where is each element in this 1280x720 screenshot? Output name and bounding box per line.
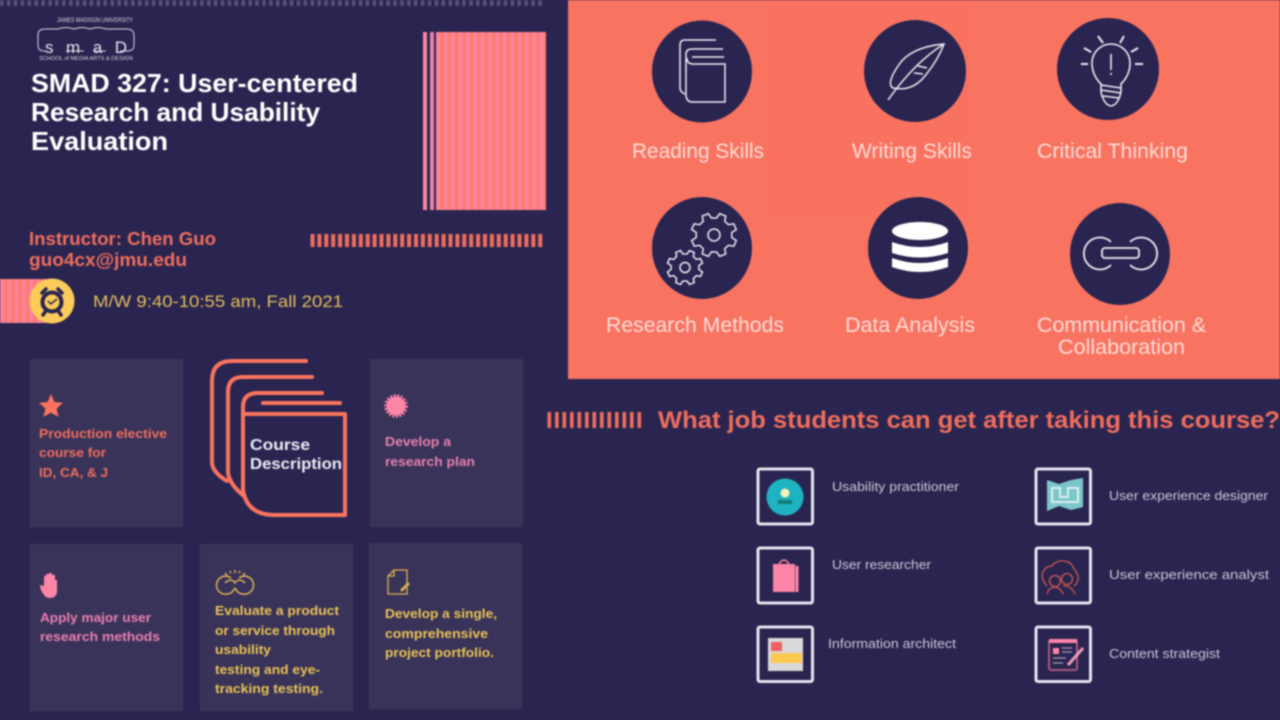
icon: map [1047, 478, 1083, 511]
job: user researcher [758, 548, 932, 603]
panel: skills [568, 0, 1280, 379]
icon: teal badge [766, 478, 804, 516]
card text: comprehensive [385, 626, 488, 641]
job: usability practitioner [758, 469, 960, 524]
card: research methods [30, 544, 183, 711]
icon: layout [768, 638, 803, 671]
label: User experience analyst [1109, 567, 1269, 582]
card: evaluate [200, 544, 353, 711]
heading stripes [546, 412, 643, 428]
title [31, 68, 358, 156]
icon: cloud people [1042, 561, 1078, 594]
left stripe accent [0, 279, 46, 323]
label: Reading Skills [632, 140, 764, 163]
skill: data analysis [868, 197, 968, 299]
card text: Evaluate a product [215, 603, 340, 618]
top stripe band [0, 0, 545, 6]
skill: communication [1070, 203, 1170, 305]
icon: hand [40, 573, 57, 598]
job: user experience analyst [1036, 548, 1269, 603]
instructor details [29, 229, 216, 270]
logo: SMAD: JAMES MADISON UNIVERSITY [57, 18, 133, 24]
card text: research plan [385, 454, 475, 469]
title: SMAD 327: User-centered [31, 68, 358, 98]
label: Communication & [1037, 314, 1206, 337]
course description book [212, 361, 345, 515]
job: information architect [758, 627, 956, 682]
icon: broken link [217, 570, 253, 594]
card text: or service through [215, 623, 335, 638]
logo: SMAD [38, 18, 134, 62]
card: production elective [30, 359, 183, 527]
skill: research methods [652, 197, 752, 299]
book label: Course [250, 437, 310, 454]
card text: project portfolio. [385, 645, 494, 660]
card text: tracking testing. [215, 681, 323, 696]
icon: shopping bag [773, 560, 798, 592]
card text [385, 434, 475, 469]
title: Evaluation [31, 126, 168, 156]
label: Content strategist [1109, 646, 1220, 661]
book label [250, 437, 342, 473]
skill: writing [864, 20, 966, 122]
book label: Description [250, 456, 342, 473]
icon: alarm clock [30, 278, 74, 324]
logo: SMAD: smaD [45, 38, 127, 57]
label: Information architect [828, 636, 956, 651]
skill: reading [652, 20, 752, 122]
card text: testing and eye- [215, 662, 320, 677]
card text: Apply major user [40, 610, 151, 625]
card text [39, 426, 167, 480]
card text: course for [39, 445, 106, 460]
card text: research methods [40, 629, 160, 644]
label: Usability practitioner [832, 479, 960, 494]
card text [40, 610, 160, 644]
card text [215, 603, 340, 696]
label: Critical Thinking [1037, 140, 1188, 163]
card text: Production elective [39, 426, 167, 441]
label: Research Methods [606, 314, 784, 337]
card text: usability [215, 642, 272, 657]
skill: critical thinking [1057, 18, 1159, 120]
class schedule: M/W 9:40-10:55 am, Fall 2021 [93, 292, 343, 311]
card text: Develop a single, [385, 606, 497, 621]
logo: SMAD: SCHOOL of MEDIA ARTS & DESIGN [39, 56, 133, 62]
label [1037, 314, 1206, 359]
label: Data Analysis [845, 314, 975, 337]
instructor details: Instructor: Chen Guo [29, 229, 216, 249]
card: research plan [370, 359, 523, 527]
heading: jobs: What job students can get after taking this course? [658, 407, 1280, 434]
striped decoration block [423, 32, 546, 210]
job: content strategist [1036, 627, 1220, 682]
stripe divider [309, 234, 544, 247]
icon: burst [386, 396, 406, 416]
label: Writing Skills [852, 140, 972, 163]
card text [385, 606, 497, 660]
icon: document and pen [388, 570, 408, 594]
label: Collaboration [1058, 336, 1185, 359]
label: User experience designer [1109, 488, 1269, 503]
label: User researcher [832, 557, 932, 572]
job: user experience designer [1036, 469, 1269, 524]
icon: content editor [1049, 639, 1083, 670]
instructor details: guo4cx@jmu.edu [29, 250, 187, 270]
card: portfolio [369, 543, 522, 709]
title: Research and Usability [31, 97, 321, 127]
card text: ID, CA, & J [39, 465, 108, 480]
card text: Develop a [385, 434, 452, 449]
icon: star [39, 394, 63, 417]
